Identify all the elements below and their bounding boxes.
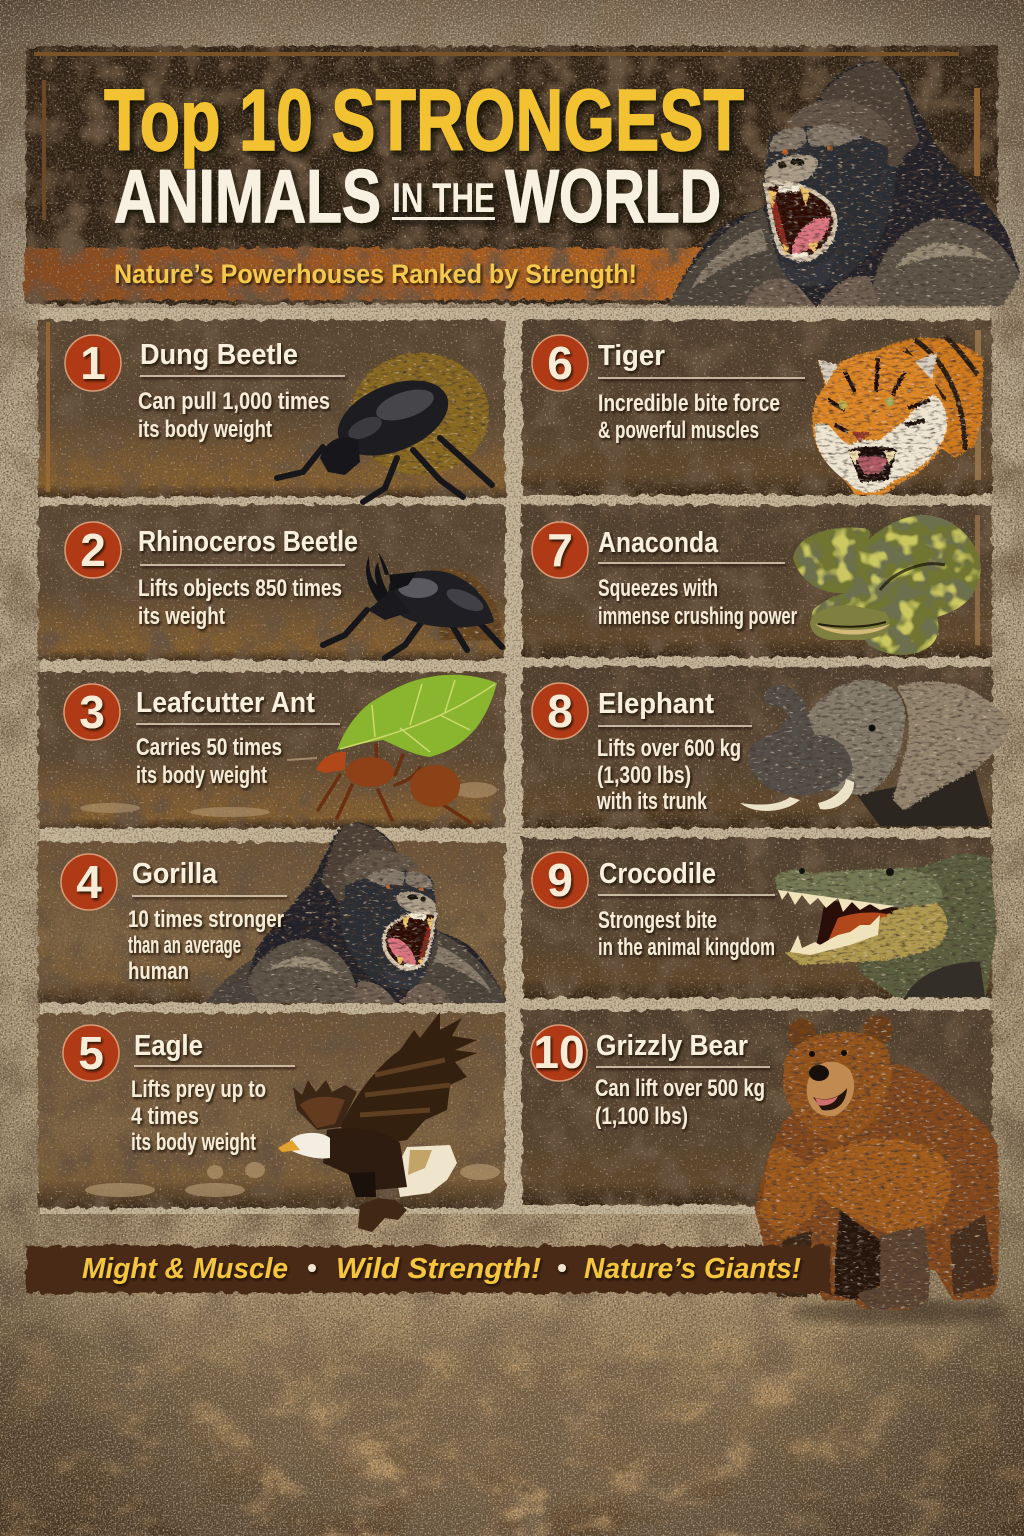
subtitle band: [24, 248, 714, 300]
card text: [598, 858, 775, 961]
icon: crocodile: [775, 853, 997, 997]
number badge: [532, 852, 588, 908]
card text: Can lift over 500 kg: [595, 1075, 765, 1102]
number badge: 1: [80, 337, 106, 389]
icon: rhinoceros beetle: [323, 552, 503, 658]
card text: Can pull 1,000 times: [138, 388, 330, 415]
card text: its body weight: [136, 762, 267, 789]
card text: Eagle: [134, 1030, 203, 1062]
title: ANIMALS: [114, 154, 381, 238]
number badge: 10: [533, 1026, 585, 1078]
card text: immense crushing power: [598, 603, 797, 630]
card text: Incredible bite force: [598, 390, 780, 417]
card text: 10 times stronger: [128, 906, 284, 933]
card text: (1,100 lbs): [595, 1103, 688, 1130]
card text: Strongest bite: [598, 907, 717, 934]
panel: 9 Crocodile: [522, 838, 997, 998]
card text: human: [128, 958, 189, 985]
card text: [131, 1030, 295, 1156]
number badge: [63, 1025, 119, 1081]
card text: Lifts prey up to: [131, 1076, 266, 1103]
card text: Elephant: [598, 688, 714, 720]
panel: 6 Tiger: [522, 320, 992, 495]
number badge: 8: [547, 685, 573, 737]
card text: its body weight: [131, 1129, 256, 1156]
number badge: [65, 335, 121, 391]
number badge: [61, 854, 117, 910]
number badge: [64, 684, 120, 740]
card text: & powerful muscles: [598, 417, 759, 444]
card text: its body weight: [138, 416, 272, 443]
card text: [598, 527, 797, 630]
subtitle band: Nature’s Powerhouses Ranked by Strength!: [114, 259, 637, 289]
panel: 5 Eagle: [38, 1012, 505, 1232]
icon: tiger: [812, 336, 983, 495]
footer banner: Might & Muscle: [82, 1253, 288, 1285]
footer banner: Nature’s Giants!: [584, 1253, 801, 1285]
panel: 4 Gorilla: [38, 822, 508, 1003]
icon: ant with leaf: [287, 675, 497, 822]
panel: header: [24, 46, 1020, 306]
footer banner: [26, 1246, 830, 1293]
panel: 10 Grizzly Bear: [522, 1010, 992, 1205]
number badge: 2: [80, 524, 106, 576]
number badge: [532, 335, 588, 391]
title: WORLD: [505, 154, 721, 238]
icon: gorilla: [205, 822, 508, 1003]
card text: Anaconda: [598, 527, 719, 559]
card text: (1,300 lbs): [597, 762, 691, 789]
card text: Rhinoceros Beetle: [138, 526, 358, 558]
panel: 7 Anaconda: [522, 505, 992, 657]
card text: in the animal kingdom: [598, 934, 775, 961]
number badge: [65, 522, 121, 578]
card text: [128, 858, 287, 985]
number badge: [532, 522, 588, 578]
number badge: 4: [76, 856, 102, 908]
card text: 4 times: [131, 1103, 199, 1130]
card text: Squeezes with: [598, 575, 718, 602]
footer banner: Wild Strength!: [336, 1253, 541, 1285]
number badge: [532, 683, 588, 739]
icon: anaconda: [793, 515, 981, 655]
card text: [136, 687, 340, 789]
card text: Leafcutter Ant: [136, 687, 315, 719]
panel: 2 Rhinoceros Beetle: [38, 505, 505, 660]
card text: [595, 1030, 770, 1130]
card text: its weight: [138, 603, 225, 630]
title: [104, 72, 744, 238]
icon: roaring gorilla: [668, 61, 1020, 306]
icon: grizzly bear: [755, 1015, 1010, 1324]
card text: Dung Beetle: [140, 339, 298, 371]
title: Top 10 STRONGEST: [104, 72, 744, 169]
number badge: 5: [78, 1027, 104, 1079]
number badge: 9: [547, 854, 573, 906]
icon: dung beetle: [277, 353, 492, 502]
card text: [596, 688, 752, 815]
panel: 3 Leafcutter Ant: [38, 672, 505, 828]
panel: 8 Elephant: [522, 667, 1010, 828]
number badge: 3: [79, 686, 105, 738]
card text: than an average: [128, 932, 241, 959]
icon: elephant: [740, 680, 1010, 826]
card text: Lifts over 600 kg: [597, 735, 741, 762]
title: IN THE: [392, 174, 495, 221]
card text: Tiger: [598, 340, 665, 372]
card text: Lifts objects 850 times: [138, 575, 342, 602]
number badge: 6: [547, 337, 573, 389]
card text: Grizzly Bear: [596, 1030, 748, 1062]
card text: [138, 339, 345, 443]
card text: with its trunk: [596, 788, 707, 815]
card text: [138, 526, 358, 630]
card text: Carries 50 times: [136, 734, 282, 761]
card text: [598, 340, 805, 444]
icon: eagle: [278, 1012, 477, 1232]
card text: Gorilla: [132, 858, 218, 890]
panel: 1 Dung Beetle: [38, 320, 505, 502]
card text: Crocodile: [599, 858, 716, 890]
number badge: 7: [547, 524, 573, 576]
